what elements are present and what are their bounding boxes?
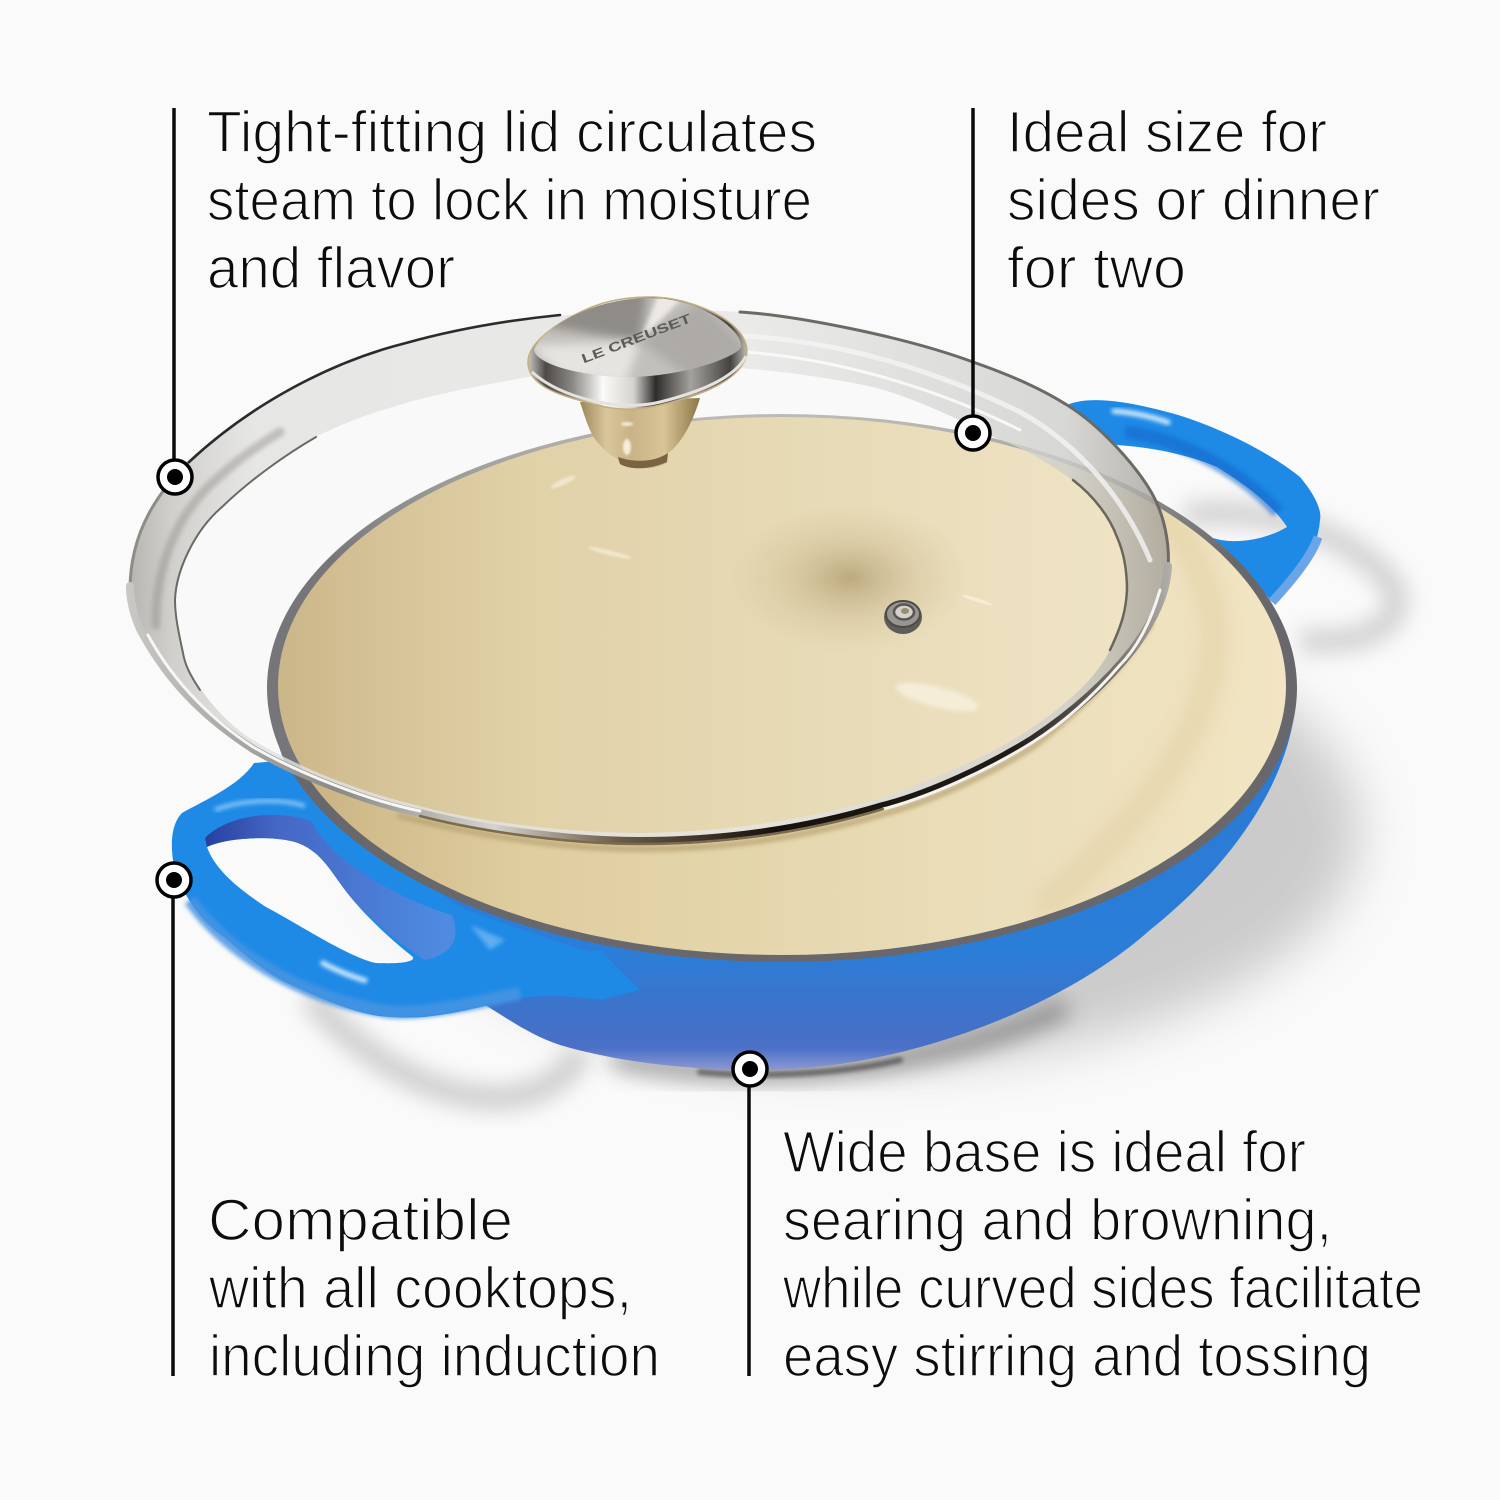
left handle [172, 760, 640, 1018]
shadow under pan [310, 513, 1396, 1098]
lid glass band [130, 310, 1168, 845]
text: size: sides or dinner [1007, 168, 1380, 233]
pan body [268, 690, 1296, 1070]
handle inner wall [205, 815, 456, 960]
text: size: for two [1007, 236, 1186, 301]
text: base: Wide base is ideal for [783, 1120, 1306, 1185]
lid shadow on pan [400, 625, 1150, 849]
callout: base [733, 1052, 767, 1376]
text: size [1007, 100, 1380, 301]
text: cooktops: Compatible [208, 1188, 513, 1253]
text: cooktops: including induction [209, 1324, 660, 1389]
text: lid: Tight-fitting lid circulates [207, 100, 817, 165]
pan interior [278, 417, 1286, 955]
lid top edge [130, 312, 1168, 590]
lid knob [525, 290, 750, 468]
text: cooktops: with all cooktops, [208, 1256, 632, 1321]
callout: cooktops [157, 863, 191, 1376]
glass lid [130, 310, 1168, 849]
lid inner glass [175, 365, 1127, 833]
text: base: easy stirring and tossing [783, 1324, 1371, 1389]
knob logo: LE CREUSET [579, 311, 693, 366]
text: lid: and flavor [207, 236, 455, 301]
knob top face [534, 298, 741, 377]
text: lid [207, 100, 817, 301]
knob dome [528, 297, 747, 409]
handle highlights [190, 801, 520, 1012]
right handle [1067, 400, 1320, 602]
infographic: braiser with feature callouts [126, 108, 1420, 1388]
vent hole [730, 503, 970, 653]
text: base: searing and browning, [783, 1188, 1332, 1253]
text: size: Ideal size for [1007, 100, 1327, 165]
knob neck [580, 398, 700, 468]
text: base [782, 1120, 1423, 1389]
callout: lid [158, 108, 192, 494]
callout: size [956, 108, 990, 450]
text: cooktops [208, 1188, 660, 1389]
text: lid: steam to lock in moisture [207, 168, 812, 233]
inner edge lines [156, 336, 1150, 690]
pan rim [267, 414, 1297, 962]
reflections in the base [549, 473, 993, 717]
lid metal edge [130, 566, 1168, 844]
text: base: while curved sides facilitate [782, 1256, 1423, 1321]
